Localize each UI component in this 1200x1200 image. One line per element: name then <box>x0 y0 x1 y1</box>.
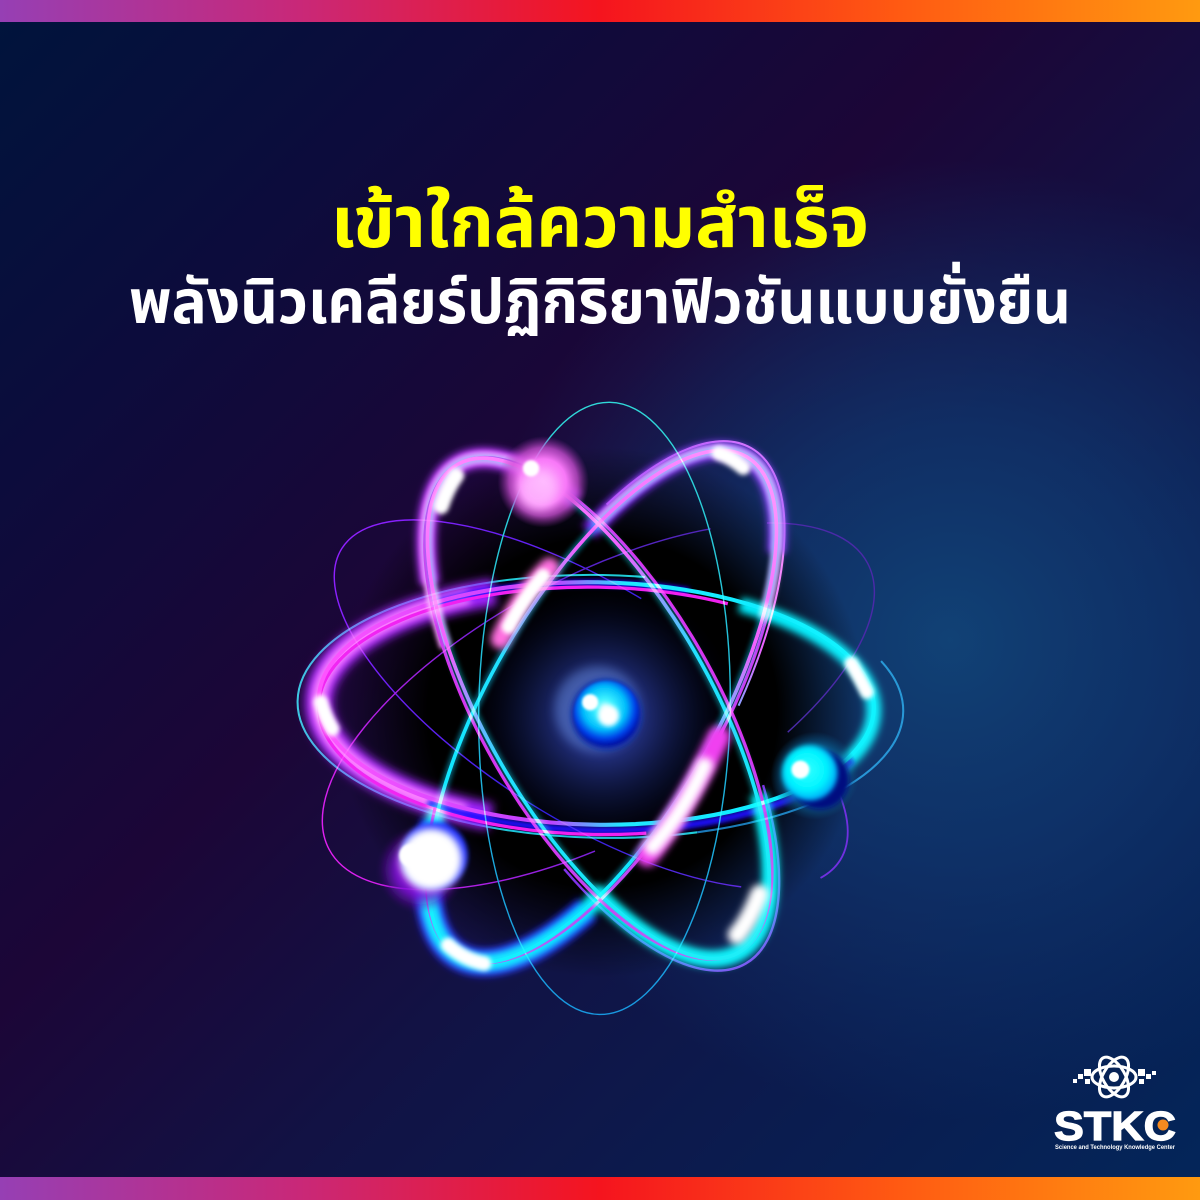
cyan band right <box>317 580 876 832</box>
logo tagline: Science and Technology Knowledge Center <box>1055 1145 1176 1151</box>
nucleus <box>555 666 642 752</box>
magenta core line <box>317 582 876 839</box>
cyan band lower left <box>359 400 846 1013</box>
thin cyan vertical orbit <box>473 400 736 1017</box>
highlight lower right <box>737 894 760 935</box>
logo orange dot <box>1158 1120 1168 1130</box>
highlight top right <box>719 453 743 468</box>
outer thin <box>346 393 850 1024</box>
highlight long lower right <box>647 737 719 855</box>
highlight far left <box>321 702 332 729</box>
electron pink <box>498 436 589 528</box>
main horizontal orbit <box>295 570 906 843</box>
purple glow upper left <box>359 407 838 1009</box>
logo <box>1054 1052 1176 1151</box>
pink band left <box>317 580 876 832</box>
outer thin cyan line <box>295 570 906 843</box>
title line 2: พลังนิวเคลียร์ปฏิกิริยาฟิวชันแบบยั่งยืน <box>129 259 1071 351</box>
top colour bar <box>0 0 1200 22</box>
magenta core <box>357 398 848 1014</box>
cyan band lower right <box>359 407 838 1009</box>
blue glow lower left <box>359 400 846 1013</box>
title line 1: เข้าใกล้ความสำเร็จ <box>331 172 869 280</box>
logo wordmark: STKC <box>1054 1103 1176 1149</box>
orbit rising to upper right <box>348 387 857 1025</box>
purple glow left <box>317 580 876 832</box>
cyan glow <box>361 400 844 1012</box>
highlight top left <box>441 476 456 506</box>
highlight bottom left <box>448 945 484 963</box>
pink band upper left <box>359 407 838 1009</box>
electron white <box>378 822 468 912</box>
outer thin <box>349 388 856 1025</box>
atom illustration <box>268 387 929 1025</box>
title <box>129 172 1071 351</box>
orbit highlights <box>321 453 867 963</box>
cyan core <box>361 409 836 1008</box>
orbit falling to lower right <box>346 393 850 1024</box>
blue upper edge <box>317 578 876 830</box>
dark core backdrop <box>337 447 868 978</box>
electron cyan <box>771 732 859 820</box>
nucleus halo <box>468 582 737 851</box>
thin purple orbit upper-left to lower-right <box>280 450 902 959</box>
cyan core line <box>317 577 876 830</box>
logo icon <box>1073 1052 1156 1102</box>
thin purple orbit lower-left to upper-right <box>268 449 929 964</box>
bottom colour bar <box>0 1177 1200 1200</box>
pink band upper right <box>359 400 846 1013</box>
blue lower edge <box>317 583 876 835</box>
cyan glow <box>361 409 836 1008</box>
purple glow upper right <box>359 400 846 1013</box>
highlight far right <box>851 663 867 692</box>
cyan core <box>361 400 844 1012</box>
magenta core <box>356 406 841 1011</box>
highlight long upper left <box>500 568 549 639</box>
